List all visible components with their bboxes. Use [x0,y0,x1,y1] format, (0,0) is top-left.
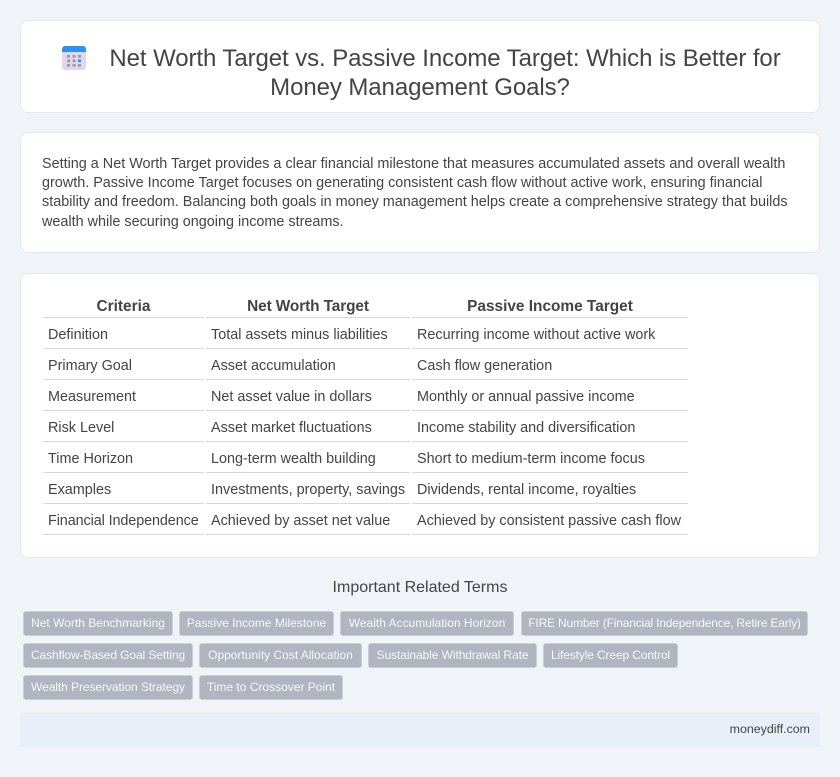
related term tags: Wealth Accumulation Horizon [349,616,505,630]
related term tags [23,611,808,700]
row: time horizon: Short to medium-term income focus [417,451,645,467]
table header: Passive Income Target [467,298,633,315]
row: risk level: Income stability and diversification [417,420,635,436]
row: examples: Dividends, rental income, royalties [417,482,636,498]
title [109,45,781,101]
title: Money Management Goals? [270,74,570,101]
row: risk level [43,420,688,442]
table header: Criteria [97,298,150,315]
related term tags: Lifestyle Creep Control [551,648,670,662]
intro paragraph: stability and freedom. Balancing both goals in money management helps create a comprehensive strategy that builds [42,194,788,210]
row: financial independence [43,513,688,535]
related term tags: Opportunity Cost Allocation [208,648,353,662]
row: time horizon [43,451,688,473]
title: Net Worth Target vs. Passive Income Target: Which is Better for [109,45,781,72]
intro paragraph: wealth while securing ongoing income streams. [42,214,344,230]
related term tags: Sustainable Withdrawal Rate [377,648,528,662]
row: primary goal [43,358,688,380]
row: primary goal: Cash flow generation [417,358,552,374]
row: financial independence: Financial Independence [48,513,199,529]
panel: comparison table card [20,273,820,558]
table header: Net Worth Target [247,298,369,315]
related term tags: Wealth Preservation Strategy [31,680,185,694]
intro paragraph: growth. Passive Income Target focuses on generating consistent cash flow without active work, ensuring financial [42,175,762,191]
row: definition: Recurring income without active work [417,327,655,343]
footer bar [20,713,820,747]
row: measurement: Net asset value in dollars [211,389,372,405]
panel: title card [20,20,820,113]
row: definition: Definition [48,327,108,343]
row: definition [43,327,688,349]
row: primary goal: Asset accumulation [211,358,336,374]
related term tags: Passive Income Milestone [187,616,326,630]
row: financial independence: Achieved by consistent passive cash flow [417,513,681,529]
row: financial independence: Achieved by asset net value [211,513,390,529]
intro paragraph [42,156,788,230]
related term tags: Net Worth Benchmarking [31,616,165,630]
heading: important related terms: Important Related Terms [333,579,507,596]
panel: intro text card [20,132,820,253]
related term tags: Cashflow-Based Goal Setting [31,648,185,662]
row: time horizon: Long-term wealth building [211,451,376,467]
intro paragraph: Setting a Net Worth Target provides a clear financial milestone that measures accumulated assets and overall wealth [42,156,785,172]
related term tags: Time to Crossover Point [207,680,335,694]
row: examples: Examples [48,482,111,498]
row: measurement: Measurement [48,389,136,405]
row: examples [43,482,688,504]
row: primary goal: Primary Goal [48,358,132,374]
row: definition: Total assets minus liabilities [211,327,388,343]
footer site name: moneydiff.com [730,722,810,736]
row: examples: Investments, property, savings [211,482,405,498]
row: measurement: Monthly or annual passive income [417,389,635,405]
related term tags: FIRE Number (Financial Independence, Retire Early) [528,616,801,630]
row: measurement [43,389,688,411]
table header [43,298,688,318]
row: time horizon: Time Horizon [48,451,133,467]
comparison table [43,298,688,535]
row: risk level: Asset market fluctuations [211,420,372,436]
icon: calendar [62,46,86,70]
row: risk level: Risk Level [48,420,114,436]
